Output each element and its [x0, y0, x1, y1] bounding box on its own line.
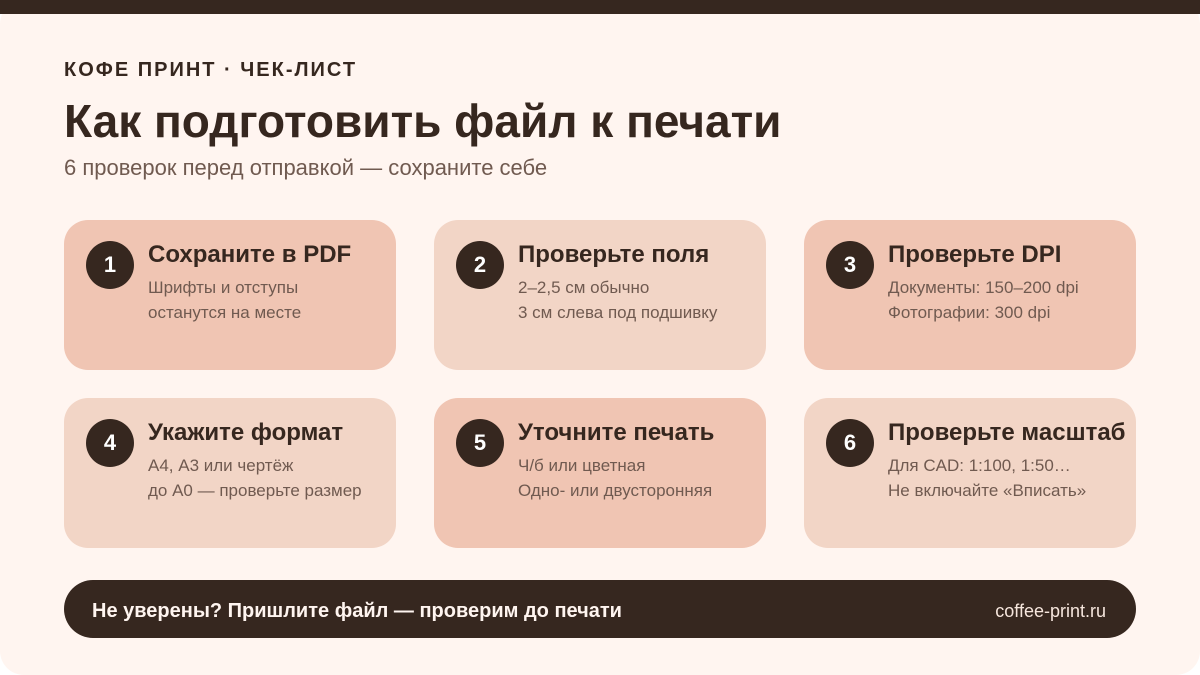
number 6 — [826, 419, 874, 467]
title: Как подготовить файл к печати — [64, 95, 781, 147]
number 3 — [826, 241, 874, 289]
number 4 — [86, 419, 134, 467]
footer banner — [64, 580, 1136, 638]
footer message: Не уверены? Пришлите файл — проверим до печати — [92, 600, 622, 622]
card 3 text: Фотографии: 300 dpi — [888, 303, 1050, 322]
number 2: 2 — [474, 252, 486, 277]
number 3: 3 — [844, 252, 856, 277]
card 5 text: Ч/б или цветная — [518, 456, 645, 475]
card 1 text: останутся на месте — [148, 303, 301, 322]
card 2 — [434, 220, 766, 370]
card 2 text: 2–2,5 см обычно — [518, 278, 649, 297]
card 6 text — [888, 456, 1086, 500]
card 4 heading: Укажите формат — [148, 419, 343, 446]
number 2 — [456, 241, 504, 289]
card 3 — [804, 220, 1136, 370]
card 5 heading: Уточните печать — [518, 419, 714, 446]
card 4 — [64, 398, 396, 548]
number 1 — [86, 241, 134, 289]
card 1 text — [148, 278, 301, 322]
card 4 text: до А0 — проверьте размер — [148, 481, 362, 500]
card 1 — [64, 220, 396, 370]
card 6 text: Не включайте «Вписать» — [888, 481, 1086, 500]
card 5 text — [518, 456, 712, 500]
card 5 text: Одно- или двусторонняя — [518, 481, 712, 500]
card 6 text: Для CAD: 1:100, 1:50… — [888, 456, 1071, 475]
card 6 — [804, 398, 1136, 548]
card 1 text: Шрифты и отступы — [148, 278, 298, 297]
card 5 — [434, 398, 766, 548]
card 6 heading: Проверьте масштаб — [888, 419, 1126, 446]
card 1 heading: Сохраните в PDF — [148, 241, 351, 268]
card 4 text: А4, А3 или чертёж — [148, 456, 293, 475]
subtitle: 6 проверок перед отправкой — сохраните себе — [64, 155, 547, 180]
number 4: 4 — [104, 430, 116, 455]
card 3 heading: Проверьте DPI — [888, 241, 1061, 268]
number 1: 1 — [104, 252, 116, 277]
number 6: 6 — [844, 430, 856, 455]
eyebrow: КОФЕ ПРИНТ · ЧЕК-ЛИСТ — [64, 59, 357, 81]
card 2 text: 3 см слева под подшивку — [518, 303, 717, 322]
card 3 text — [888, 278, 1079, 322]
card 3 text: Документы: 150–200 dpi — [888, 278, 1079, 297]
top bar — [0, 0, 1200, 14]
card 2 text — [518, 278, 718, 322]
number 5: 5 — [474, 430, 486, 455]
card 2 heading: Проверьте поля — [518, 241, 709, 268]
number 5 — [456, 419, 504, 467]
card 4 text — [148, 456, 362, 500]
footer website: coffee-print.ru — [995, 601, 1106, 621]
